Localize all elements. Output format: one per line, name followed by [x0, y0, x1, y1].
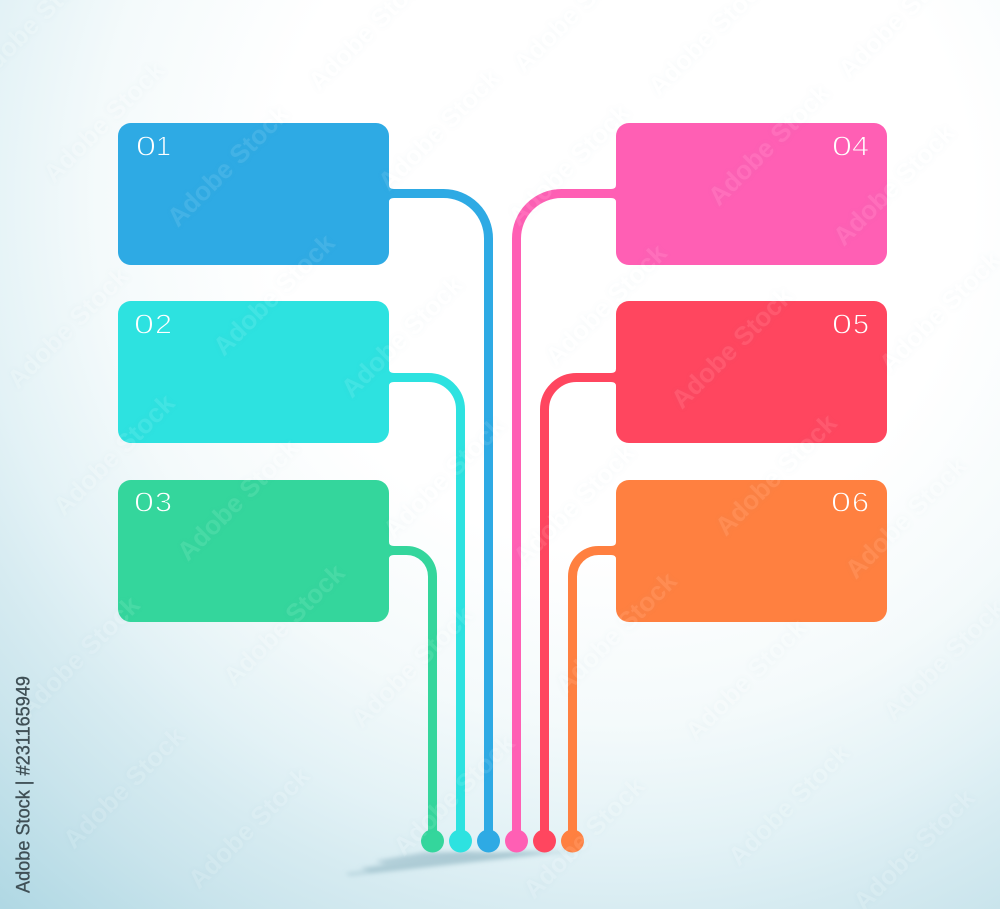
- watermark pattern: Adobe Stock: [507, 437, 641, 571]
- panel 01: [118, 123, 389, 265]
- number 06: 0: [831, 486, 851, 518]
- watermark pattern: Adobe Stock: [161, 98, 295, 232]
- dot 03: [421, 830, 444, 852]
- panel 05: [616, 301, 887, 443]
- watermark pattern: Adobe Stock: [702, 77, 836, 211]
- watermark pattern: Adobe Stock: [12, 589, 146, 723]
- watermark pattern: Adobe Stock: [1, 260, 135, 394]
- watermark pattern: Adobe Stock: [709, 407, 843, 541]
- watermark pattern: Adobe Stock: [335, 269, 469, 403]
- number 05: 0: [832, 308, 852, 340]
- dot 02: [449, 830, 472, 852]
- watermark pattern: Adobe Stock: [502, 97, 636, 231]
- watermark pattern: Adobe Stock: [549, 565, 683, 699]
- number 04: 0: [832, 130, 852, 162]
- connector 05 line: [544, 369, 616, 841]
- watermark pattern: Adobe Stock: [37, 54, 171, 188]
- watermark pattern: Adobe Stock: [387, 727, 521, 861]
- number 03: 0: [134, 486, 154, 518]
- watermark pattern: Adobe Stock: [372, 62, 506, 196]
- dot 04: [505, 830, 528, 852]
- dot 01: [477, 830, 500, 852]
- number 04: 4: [852, 130, 869, 162]
- watermark pattern: Adobe Stock: [47, 387, 181, 521]
- watermark pattern: Adobe Stock: [217, 557, 351, 691]
- connector 01 line: [389, 185, 488, 841]
- watermark pattern: Adobe Stock: [665, 280, 799, 414]
- watermark pattern: Adobe Stock: [539, 237, 673, 371]
- watermark pattern: Adobe Stock: [207, 227, 341, 361]
- watermark pattern: Adobe Stock: [171, 432, 305, 566]
- number 02: 2: [155, 308, 172, 340]
- panel 04: [616, 123, 887, 265]
- number 03: 3: [155, 486, 172, 518]
- connector 06 line: [572, 542, 616, 841]
- watermark pattern: Adobe Stock: [182, 760, 316, 894]
- connector 03 line: [389, 542, 432, 841]
- watermark pattern: Adobe Stock: [517, 770, 651, 904]
- number 05: 5: [853, 308, 869, 340]
- watermark pattern: Adobe Stock: [722, 737, 856, 871]
- watermark pattern: Adobe Stock: [57, 720, 191, 854]
- panel 03: [118, 480, 389, 622]
- watermark pattern: Adobe Stock: [679, 612, 813, 746]
- connector 02 line: [389, 369, 460, 841]
- panel 06: [616, 480, 887, 622]
- dot 06: [561, 830, 584, 852]
- watermark pattern: Adobe Stock: [377, 410, 511, 544]
- stock id side text: Adobe Stock | #231165949: [14, 676, 34, 893]
- number 06: 6: [852, 486, 869, 518]
- number 01: 0: [136, 130, 156, 162]
- number 01: 1: [156, 130, 171, 162]
- panel 02: [118, 301, 389, 443]
- connector 04 line: [516, 185, 616, 841]
- dot 05: [533, 830, 556, 852]
- watermark pattern: Adobe Stock: [827, 117, 961, 251]
- cast shadow under the dots: [345, 851, 580, 876]
- number 02: 0: [134, 308, 154, 340]
- watermark pattern: Adobe Stock: [839, 450, 973, 584]
- watermark pattern: Adobe Stock: [345, 599, 479, 733]
